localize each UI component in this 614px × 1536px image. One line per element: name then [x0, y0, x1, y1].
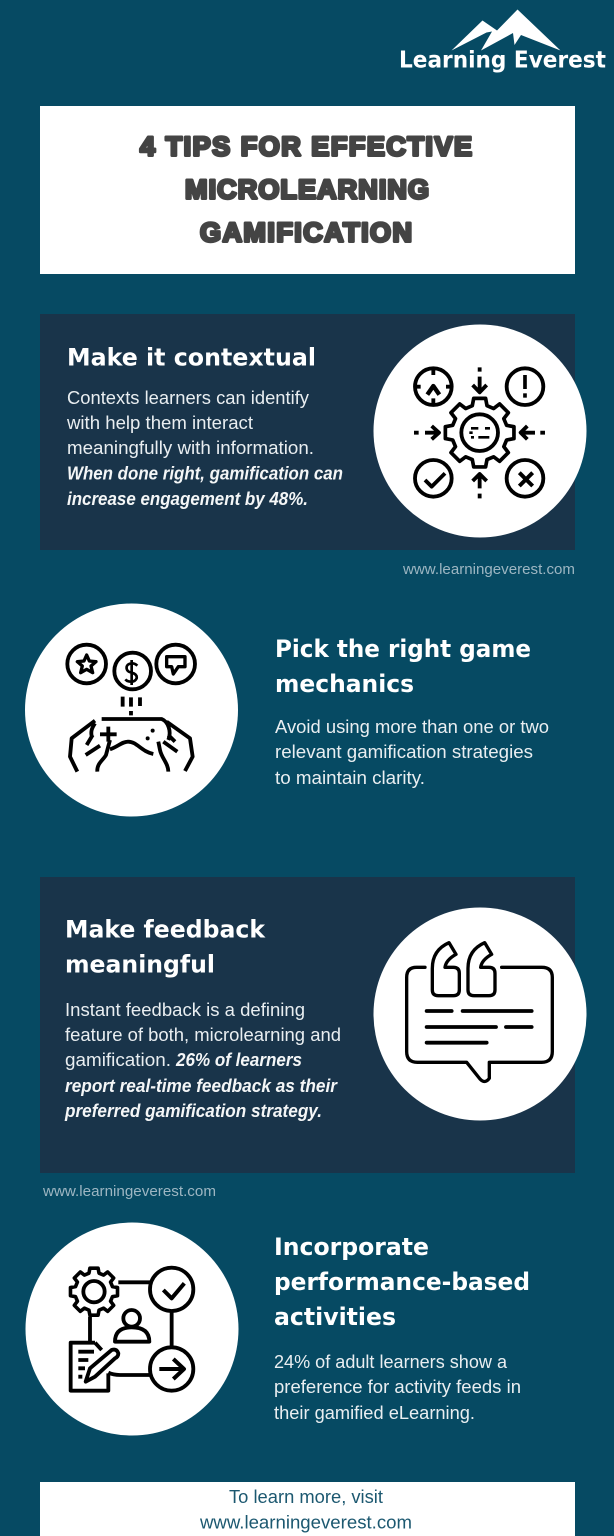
icon: gear with arrows	[374, 324, 586, 538]
panel: incorporate performance-based activities	[274, 1233, 530, 1423]
heading: performance-based	[274, 1268, 530, 1296]
body text: 24% of adult learners show a	[274, 1352, 508, 1372]
title: 4 TIPS FOR EFFECTIVE	[140, 132, 472, 162]
heading: Make feedback	[65, 916, 266, 944]
title panel	[40, 106, 575, 274]
watermark url: www.learningeverest.com	[42, 1184, 216, 1200]
heading: meaningful	[65, 951, 215, 979]
footer text: www.learningeverest.com	[199, 1512, 412, 1532]
title	[140, 132, 472, 248]
body text: report real-time feedback as their	[65, 1076, 338, 1096]
logo: Learning Everest	[399, 10, 606, 74]
heading: Make it contextual	[67, 344, 316, 372]
body text: meaningfully with information.	[67, 438, 314, 458]
body text: with help them interact	[66, 413, 253, 433]
body text	[66, 388, 343, 509]
heading: activities	[274, 1303, 396, 1331]
body text: increase engagement by 48%.	[67, 489, 308, 509]
watermark url: www.learningeverest.com	[402, 562, 575, 578]
icon: performance workflow	[26, 1222, 238, 1436]
body text: their gamified eLearning.	[274, 1403, 475, 1423]
heading	[274, 1233, 530, 1331]
body text	[275, 717, 549, 788]
footer panel	[40, 1482, 575, 1536]
heading	[65, 916, 266, 979]
body text: Contexts learners can identify	[67, 388, 309, 408]
title: GAMIFICATION	[200, 218, 412, 248]
body text: preferred gamification strategy.	[64, 1101, 322, 1121]
panel: make it contextual	[40, 314, 575, 550]
body text: to maintain clarity.	[275, 768, 425, 788]
body text: feature of both, microlearning and	[65, 1025, 341, 1045]
title: MICROLEARNING	[185, 174, 429, 204]
body text	[64, 1000, 341, 1121]
body text: preference for activity feeds in	[274, 1377, 521, 1397]
heading	[275, 635, 531, 698]
icon: speech bubble with quote marks	[374, 908, 586, 1120]
heading: mechanics	[275, 670, 414, 698]
body text: 26% of learners	[175, 1050, 302, 1070]
body text: When done right, gamification can	[67, 464, 343, 484]
panel: make feedback meaningful	[40, 877, 575, 1173]
body text	[274, 1352, 521, 1423]
body text: Instant feedback is a defining	[65, 1000, 305, 1020]
body text: Avoid using more than one or two	[275, 717, 549, 737]
footer text	[199, 1487, 412, 1532]
panel: pick the right game mechanics	[275, 635, 549, 788]
body text: gamification.	[65, 1050, 171, 1070]
heading: Pick the right game	[275, 635, 531, 663]
icon: mountains	[452, 10, 560, 50]
heading: Incorporate	[274, 1233, 429, 1261]
footer text: To learn more, visit	[229, 1487, 383, 1507]
body text: relevant gamification strategies	[275, 742, 533, 762]
icon: game controller	[25, 604, 238, 816]
